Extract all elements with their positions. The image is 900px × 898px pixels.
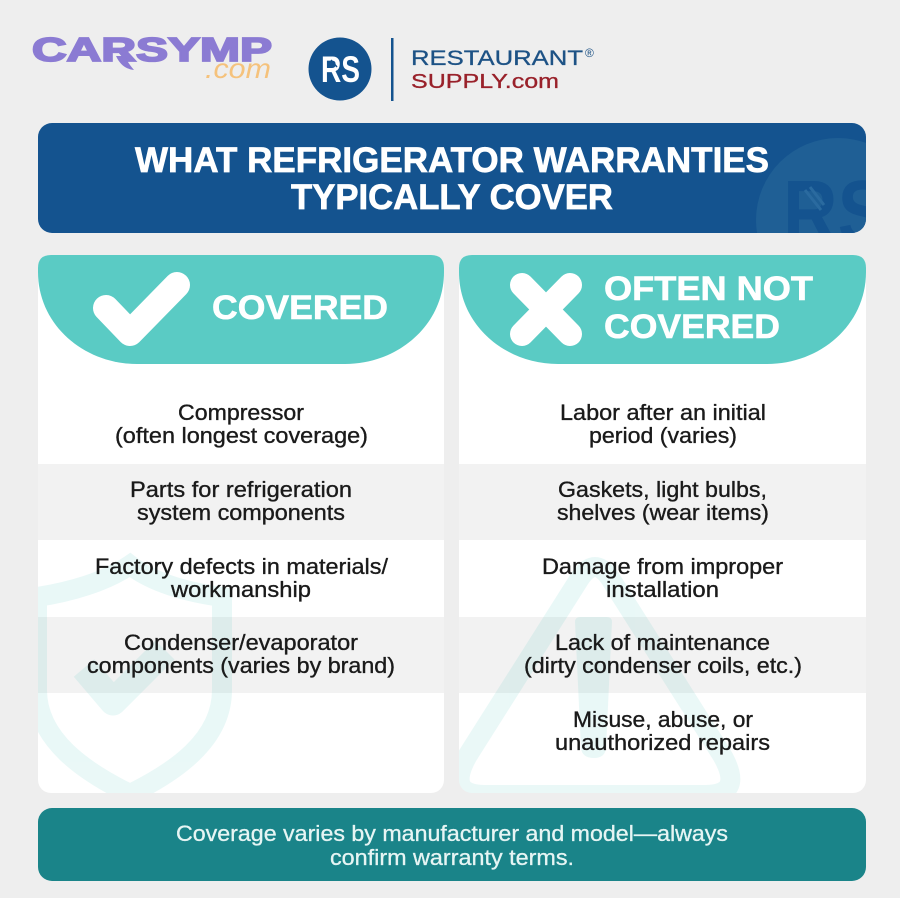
icon: RS circle: RS — [321, 49, 360, 90]
list: not covered items: Lack of maintenance — [555, 630, 770, 655]
list: not covered items — [524, 400, 802, 755]
logo: CarSymp: .com — [205, 53, 271, 84]
list: not covered items: Damage from improper — [542, 554, 783, 579]
logo: CarSymp — [32, 31, 272, 84]
watermark: RS logo — [756, 138, 866, 233]
title banner — [38, 123, 866, 233]
list: not covered items: period (varies) — [589, 423, 737, 448]
logo: RestaurantSupply: SUPPLY.com — [411, 71, 559, 93]
logo: RestaurantSupply — [308, 38, 594, 101]
list: not covered items: installation — [606, 577, 719, 602]
title text: WHAT REFRIGERATOR WARRANTIES — [135, 141, 769, 180]
title text: TYPICALLY COVER — [291, 178, 613, 217]
footer note — [38, 808, 866, 881]
footer note: Coverage varies by manufacturer and model—always — [176, 821, 728, 846]
panel: often not covered — [459, 255, 866, 795]
list: covered items: Compressor — [178, 400, 304, 425]
header: often not covered — [459, 255, 866, 364]
list: covered items: Condenser/evaporator — [124, 630, 358, 655]
list: not covered items: shelves (wear items) — [557, 500, 769, 525]
logo: CarSymp: CARSYMP — [32, 31, 272, 68]
list: covered items: Factory defects in materials/ — [95, 554, 389, 579]
grey rows — [38, 464, 444, 693]
heading: often not covered: OFTEN NOT — [604, 270, 813, 308]
list: covered items: system components — [137, 500, 345, 525]
icon: x mark — [522, 285, 570, 334]
heading: often not covered — [604, 270, 813, 346]
icon: check mark — [106, 285, 177, 333]
footer note: confirm warranty terms. — [330, 845, 574, 870]
list: not covered items: unauthorized repairs — [555, 730, 770, 755]
logo: RestaurantSupply: ® — [585, 46, 594, 60]
panel: covered — [37, 255, 444, 794]
list: not covered items: Misuse, abuse, or — [573, 707, 753, 732]
grey rows — [459, 464, 866, 693]
list: not covered items: (dirty condenser coils, etc.) — [524, 653, 802, 678]
header: covered — [38, 255, 444, 364]
list: covered items: Parts for refrigeration — [130, 477, 352, 502]
list: not covered items: Labor after an initial — [560, 400, 766, 425]
list: not covered items: Gaskets, light bulbs, — [558, 477, 767, 502]
heading: covered: COVERED — [212, 289, 388, 327]
list: covered items: components (varies by brand) — [87, 653, 395, 678]
watermark: warning triangle — [460, 567, 730, 795]
icon: RS circle — [308, 38, 372, 100]
list: covered items — [87, 400, 395, 678]
list: covered items: (often longest coverage) — [115, 423, 368, 448]
title text — [135, 141, 769, 217]
heading: often not covered: COVERED — [604, 308, 780, 346]
watermark: shield — [37, 565, 222, 794]
list: covered items: workmanship — [170, 577, 311, 602]
logo: RestaurantSupply: RESTAURANT — [411, 47, 583, 70]
